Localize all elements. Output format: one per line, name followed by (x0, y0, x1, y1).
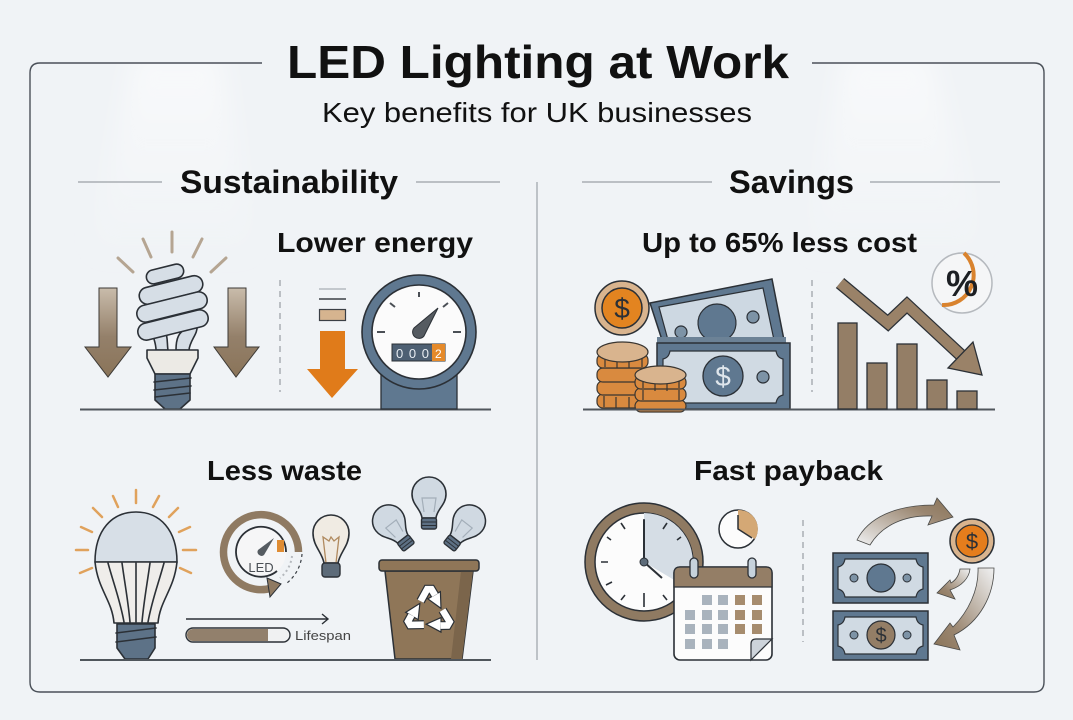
icon: spiral bulb (135, 263, 210, 409)
light beams (90, 55, 985, 260)
icon: recycling bin (379, 560, 479, 659)
ground line (583, 408, 995, 410)
icon: dollar coin (595, 281, 649, 335)
icon: small return arrow (937, 569, 970, 599)
heading: fast payback: Fast payback (694, 455, 883, 486)
icon: wall clock (585, 503, 703, 621)
ground line (80, 408, 491, 410)
heading: less waste: Less waste (207, 455, 362, 486)
title: LED Lighting at Work (287, 36, 789, 88)
dashed divider (811, 280, 813, 392)
icon: front banknote (657, 343, 790, 409)
icon: mini clock (719, 510, 758, 548)
lifespan arrow (186, 614, 328, 624)
icon: bottom banknote (833, 611, 928, 660)
icon: calendar (674, 558, 772, 660)
icon: falling bulbs (366, 477, 492, 557)
icon: front banknote: $ (715, 361, 731, 392)
icon: orange coin: $ (966, 529, 978, 554)
centre divider (536, 182, 538, 660)
panel: fast payback (585, 455, 994, 660)
panel: up to 65% less cost (583, 227, 995, 412)
icon: top banknote (833, 553, 928, 603)
icon: small bulb (313, 515, 349, 577)
icon: orange down arrow (307, 331, 358, 398)
lifespan bar: Lifespan (295, 628, 351, 643)
icon: percent ring: % (946, 263, 978, 304)
icon: LED bulb (95, 512, 177, 659)
heading: cost: Up to 65% less cost (642, 227, 917, 258)
icon: percent ring (932, 253, 992, 313)
icon: energy meter: 2 (435, 347, 442, 361)
icon: rays (76, 490, 196, 573)
icon: dollar coin: $ (614, 293, 630, 324)
panel: less waste (76, 455, 492, 660)
icon: coin stack right (635, 366, 686, 412)
icon: LED gauge: LED (248, 560, 274, 575)
icon: coin stack left (597, 342, 648, 408)
dashed divider (279, 280, 281, 392)
panel: lower energy (80, 227, 491, 410)
ground line (80, 659, 491, 661)
icon: LED gauge (224, 515, 302, 597)
icon: level bars (319, 289, 346, 320)
heading: lower energy: Lower energy (277, 227, 473, 258)
lifespan bar (186, 628, 351, 643)
bar chart (838, 323, 977, 409)
icon: down arrow left (85, 288, 131, 377)
icon: energy meter: 000 (396, 346, 429, 361)
icon: energy meter (362, 275, 476, 409)
icon: down arrow right (214, 288, 259, 377)
subtitle: Key benefits for UK businesses (322, 97, 752, 128)
icon: falling trend arrow (840, 283, 982, 375)
icon: arrow up to coin (857, 498, 953, 545)
dashed divider (802, 520, 804, 642)
icon: large return arrow (934, 568, 994, 650)
section heading: Savings: Savings (729, 164, 854, 200)
icon: rays (118, 232, 226, 272)
icon: orange coin (950, 519, 994, 563)
icon: back banknote (650, 279, 786, 343)
section heading: Sustainability: Sustainability (180, 164, 398, 200)
icon: bottom banknote: $ (875, 625, 887, 647)
